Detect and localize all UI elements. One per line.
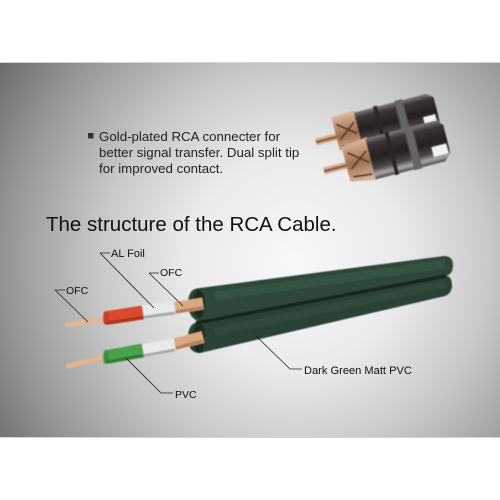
callout: AL Foil (100, 248, 154, 308)
background panel (0, 62, 500, 438)
bullet marker (88, 133, 94, 138)
callout: PVC: PVC (175, 389, 197, 401)
callout: OFC right (149, 267, 183, 306)
icon: RCA connector pair photo (311, 90, 452, 192)
copper core (68, 357, 106, 366)
groove shadow (196, 276, 446, 323)
copper braid (172, 304, 203, 308)
upper tube jacket (188, 256, 453, 322)
callout: OFC right: OFC (160, 267, 183, 279)
callout: OFC left (55, 285, 89, 322)
foil (142, 345, 175, 351)
callout: Dark Green Matt PVC (256, 336, 412, 377)
description text: better signal transfer. Dual split tip (99, 145, 299, 160)
callout: AL Foil: AL Foil (111, 248, 145, 260)
upper plug (311, 90, 442, 162)
bullet text block (88, 129, 299, 176)
description text: Gold-plated RCA connecter for (99, 129, 281, 144)
callout: Dark Green Matt PVC: Dark Green Matt PVC (304, 365, 412, 377)
foil (142, 308, 175, 312)
copper braid (172, 337, 203, 345)
lower wire (68, 337, 203, 366)
left end faces (193, 290, 205, 318)
illustration: twin cable (67, 256, 453, 366)
callout: PVC (126, 358, 197, 401)
upper jacket highlight (215, 264, 445, 296)
lower tube jacket (188, 276, 452, 353)
red insulation (107, 312, 143, 318)
upper wire (67, 304, 203, 325)
title: The structure of the RCA Cable. (46, 213, 337, 236)
lower plug (318, 118, 452, 192)
description text: for improved contact. (99, 161, 223, 176)
lower jacket highlight (215, 284, 445, 332)
green insulation (107, 350, 143, 357)
callout: OFC left: OFC (66, 285, 89, 297)
copper core (67, 319, 104, 325)
